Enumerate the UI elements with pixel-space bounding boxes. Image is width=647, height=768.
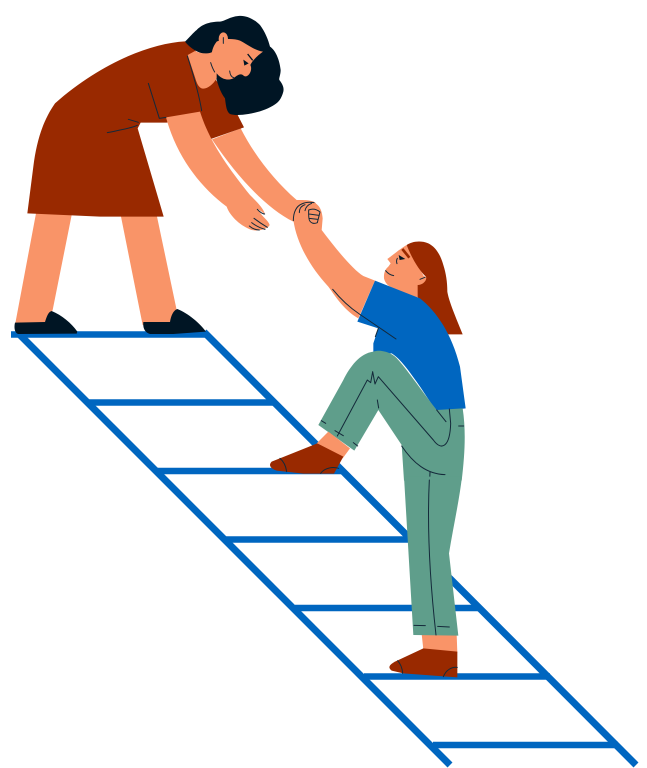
ankle xyxy=(422,634,457,653)
hair xyxy=(185,16,284,115)
fist lines xyxy=(293,202,320,223)
far arm xyxy=(212,128,317,222)
hand finger lines xyxy=(249,209,267,230)
ankle xyxy=(317,432,350,458)
ladder rungs xyxy=(11,334,618,745)
eye xyxy=(399,255,405,260)
face xyxy=(384,245,425,300)
figure: climbing woman xyxy=(270,202,466,490)
brow xyxy=(248,54,253,60)
ear xyxy=(219,32,228,46)
dress fold lines xyxy=(107,56,202,133)
arm and fist xyxy=(293,202,375,318)
standing shoe xyxy=(389,648,457,677)
t-shirt xyxy=(357,281,466,412)
ladder right rail xyxy=(204,332,636,765)
figure: helping woman standing on top of ladder xyxy=(14,16,317,334)
hair xyxy=(407,242,463,334)
shoes xyxy=(14,309,206,334)
face lines xyxy=(211,38,234,78)
trouser and shoe lines xyxy=(398,480,457,677)
trouser lower leg xyxy=(404,477,462,636)
brow xyxy=(402,249,409,258)
face lines xyxy=(386,258,425,279)
ear xyxy=(417,275,426,285)
face xyxy=(211,39,263,80)
arm and trouser lines xyxy=(280,289,464,490)
legs xyxy=(15,213,177,325)
head of climbing woman xyxy=(384,242,463,334)
ladder xyxy=(11,332,636,765)
eye xyxy=(243,60,249,66)
neck and chest xyxy=(188,49,217,89)
dress xyxy=(27,41,244,217)
ladder left rail xyxy=(17,332,450,765)
lower leg and foot of climbing woman xyxy=(389,477,462,677)
head of helping woman xyxy=(185,16,284,115)
near arm and hand xyxy=(166,112,270,230)
raised shoe xyxy=(270,443,343,474)
trousers xyxy=(318,351,465,481)
